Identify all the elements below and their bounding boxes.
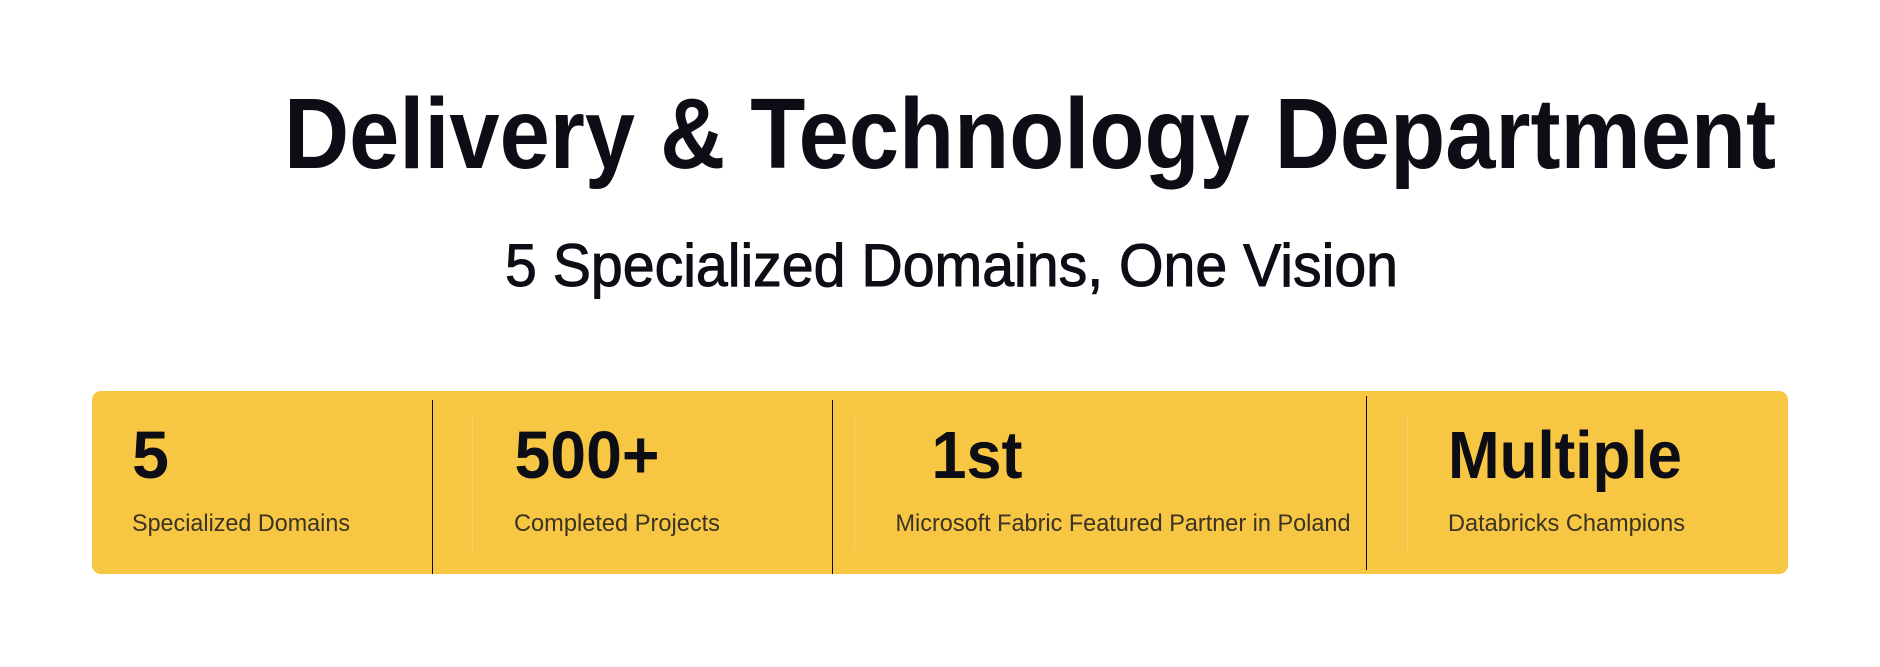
panel background: [92, 391, 1788, 574]
stat value: 1st: 1st: [932, 418, 1022, 493]
divider 2: [832, 400, 833, 574]
stat value: 5: 5: [132, 418, 169, 493]
stat label: completed projects: Completed Projects: [514, 510, 720, 537]
divider 3: [1366, 396, 1367, 570]
stat: databricks champions: [1448, 418, 1685, 537]
stat value: Multiple: Multiple: [1448, 418, 1682, 493]
subtitle: 5 Specialized Domains, One Vision: [505, 232, 1398, 299]
panel: key statistics: [92, 391, 1788, 574]
stat: microsoft fabric partner: [896, 418, 1350, 537]
divider 1: [432, 400, 433, 574]
stat: specialized domains: [132, 418, 350, 537]
stat value: 500+: 500+: [514, 418, 660, 493]
stat label: microsoft fabric partner: Microsoft Fabric Featured Partner in Poland: [896, 510, 1350, 537]
stat: completed projects: [514, 418, 720, 537]
stat label: databricks champions: Databricks Champions: [1448, 510, 1685, 537]
stat label: specialized domains: Specialized Domains: [132, 510, 350, 537]
